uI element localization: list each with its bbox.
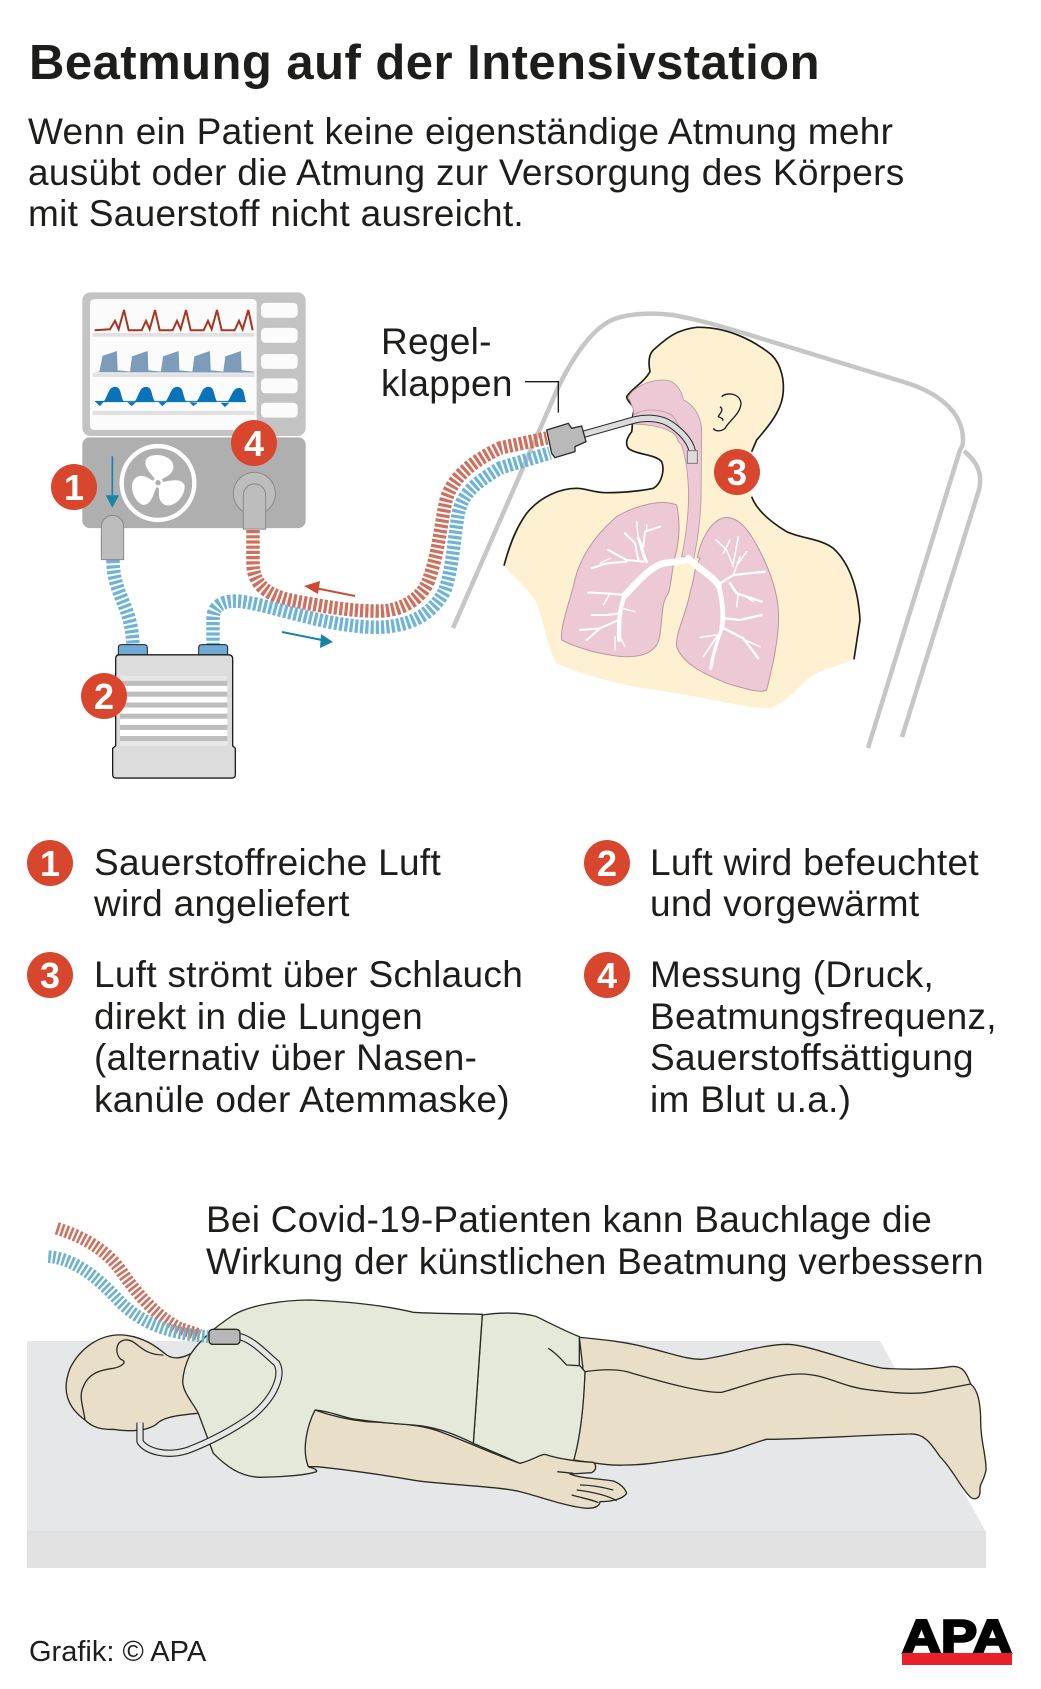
arm and hand xyxy=(304,1410,627,1508)
title: Beatmung auf der Intensivstation xyxy=(29,36,820,90)
intro text: ausübt oder die Atmung zur Versorgung des Körpers xyxy=(28,152,905,193)
legend item 4 xyxy=(584,952,997,1120)
illustration: bed outline xyxy=(453,314,980,748)
shirt xyxy=(183,1300,482,1477)
flow curve xyxy=(95,387,246,407)
legend item 3: Luft strömt über Schlauch xyxy=(94,954,523,995)
legend item 2 xyxy=(584,840,979,924)
mattress xyxy=(27,1341,986,1568)
torso and head fill xyxy=(504,327,860,708)
legend item 4: im Blut u.a.) xyxy=(650,1079,851,1120)
ventilator machine xyxy=(82,292,306,778)
diagram badge 2: 2 xyxy=(94,676,114,717)
covid note xyxy=(206,1199,984,1282)
airway xyxy=(628,380,702,558)
diagram badge 4 xyxy=(231,420,277,466)
intro text: mit Sauerstoff nicht ausreicht. xyxy=(28,193,524,234)
neck and head xyxy=(66,1335,200,1431)
hoses: circuit xyxy=(113,438,550,646)
screen xyxy=(90,299,257,430)
diagram badge 4: 4 xyxy=(244,423,264,464)
hoses xyxy=(48,1228,208,1337)
breathing tube and valve xyxy=(547,418,697,463)
legend item 3: kanüle oder Atemmaske) xyxy=(94,1079,510,1120)
screen bands xyxy=(93,333,255,415)
illustration: patient upper body with lungs xyxy=(504,327,860,708)
label: Regelklappen: klappen xyxy=(381,363,513,404)
callout line xyxy=(525,382,558,413)
legend item 1: wird angeliefert xyxy=(93,883,350,924)
legend item 4: Beatmungsfrequenz, xyxy=(650,996,997,1037)
legend item 2: Luft wird befeuchtet xyxy=(650,842,979,883)
covid note: Bei Covid-19-Patienten kann Bauchlage die xyxy=(206,1199,932,1240)
left lung xyxy=(561,503,679,657)
machine base xyxy=(82,437,306,528)
legend item 1: 1 xyxy=(40,843,60,884)
legend item 2: und vorgewärmt xyxy=(650,883,920,924)
legend item 4: 4 xyxy=(597,955,617,996)
front leg xyxy=(573,1370,986,1499)
red return hose xyxy=(253,438,547,611)
flow arrows xyxy=(282,581,355,648)
shorts xyxy=(473,1313,585,1463)
blue hose to humidifier xyxy=(113,560,133,646)
tube around patient xyxy=(140,1337,279,1453)
fan xyxy=(122,446,194,520)
legend item 3: (alternativ über Nasen- xyxy=(94,1037,477,1078)
legend item 4: Sauerstoffsättigung xyxy=(650,1037,974,1078)
ear xyxy=(713,394,741,431)
pressure curve xyxy=(94,351,254,373)
monitor buttons xyxy=(261,303,298,418)
diagram badge 1: 1 xyxy=(64,467,84,508)
intake arrow xyxy=(106,456,119,508)
legend item 3: 3 xyxy=(40,955,60,996)
body outline xyxy=(504,327,860,659)
credit: Grafik: © APA xyxy=(29,1636,207,1668)
legend item 2: 2 xyxy=(597,843,617,884)
blue supply hose xyxy=(213,453,550,646)
monitor housing xyxy=(82,292,306,436)
legend item 4: Messung (Druck, xyxy=(650,954,934,995)
label: Regelklappen: Regel- xyxy=(381,321,492,362)
bronchi xyxy=(580,522,765,668)
badge 3 xyxy=(714,449,760,495)
humidifier xyxy=(113,645,235,778)
legend item 3 xyxy=(27,952,523,1120)
right port xyxy=(233,472,275,529)
diagram badge 2 xyxy=(81,673,127,719)
back leg xyxy=(579,1337,971,1413)
right lung xyxy=(677,517,779,691)
APA logo: APA xyxy=(902,1610,1012,1663)
left port xyxy=(101,515,124,560)
label: Regelklappen xyxy=(381,321,513,404)
intro text xyxy=(28,111,905,234)
legend item 1 xyxy=(27,840,441,924)
ecg curve xyxy=(95,310,253,330)
legend item 3: direkt in die Lungen xyxy=(94,996,423,1037)
legend item 1: Sauerstoffreiche Luft xyxy=(94,842,441,883)
intro text: Wenn ein Patient keine eigenständige Atmung mehr xyxy=(28,111,893,152)
prone patient xyxy=(48,1228,986,1508)
diagram badge 1 xyxy=(51,464,97,510)
badge 3: 3 xyxy=(727,452,747,493)
covid note: Wirkung der künstlichen Beatmung verbessern xyxy=(206,1241,984,1282)
connector xyxy=(209,1329,240,1344)
